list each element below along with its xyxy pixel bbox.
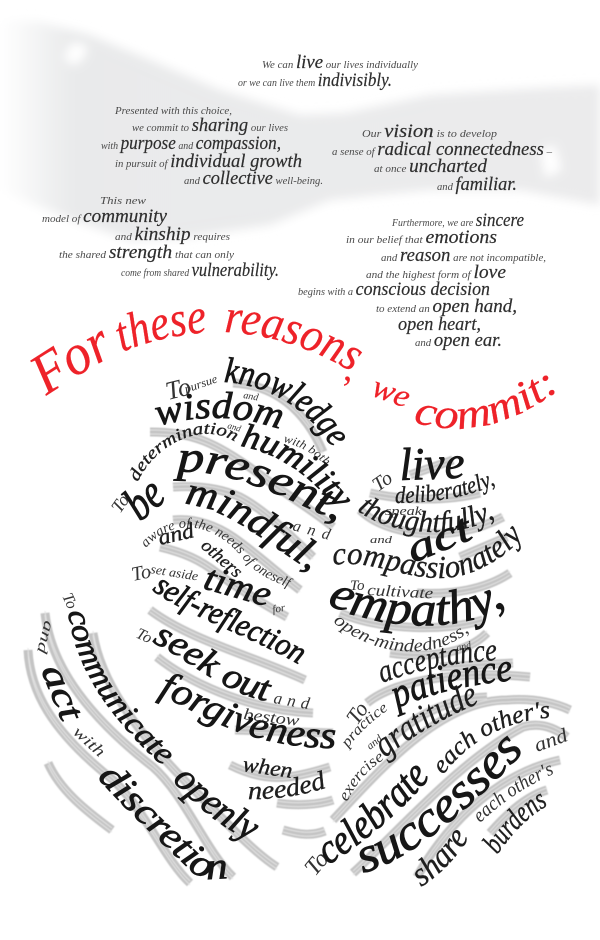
commitment: practice patience and exercise gratitude xyxy=(341,662,512,801)
paragraph: furthermore, we are sincere: begins with a conscious decision xyxy=(298,279,490,300)
paragraph: our vision: at once uncharted xyxy=(374,156,487,177)
commitment: live deliberately, speak thoughtfully, act compassionately: speak xyxy=(385,503,422,518)
commitment: set aside time for self-reflection: time xyxy=(200,557,276,614)
commitment: pursue knowledge and wisdom: knowledge xyxy=(224,356,345,446)
heading: for these reasons, we commit: , xyxy=(343,348,352,388)
commitment: cultivate empathy, open-mindedness and acceptance: open-mindedness, xyxy=(334,618,469,652)
commitment: celebrate successes and share burdens: To xyxy=(300,846,334,881)
intro text: live individually or indivisibly: We can live our lives individually xyxy=(262,52,418,73)
commitment: celebrate successes and share burdens: and xyxy=(531,724,572,757)
ink brush strokes behind the commitments xyxy=(28,381,570,885)
commitment: be present, mindful: and xyxy=(291,517,333,544)
commitment: cultivate empathy, open-mindedness and acceptance: empathy, xyxy=(330,588,504,634)
paragraph: furthermore, we are sincere: to extend an open hand, xyxy=(376,296,517,317)
commitment: live deliberately, speak thoughtfully, act compassionately xyxy=(333,437,521,578)
commitment: be present, mindful: and xyxy=(156,517,197,550)
paragraph: presented with this choice xyxy=(101,105,323,189)
commitment: communicate openly and act with discretion: To xyxy=(58,591,80,612)
commitment: pursue knowledge and wisdom: pursue xyxy=(181,371,220,396)
commitment: be present, mindful: be xyxy=(113,467,175,530)
commitment: practice patience and exercise gratitude: patience xyxy=(392,662,512,718)
commitment: practice patience and exercise gratitude: practice xyxy=(343,704,387,751)
commitment: seek out and bestow forgiveness: needed xyxy=(248,770,326,800)
paragraph: our vision: a sense of radical connectedness – xyxy=(332,139,552,160)
intro text: live individually or indivisibly: or we can live them indivisibly. xyxy=(238,70,392,91)
paragraph: presented with this choice: Presented with this choice, xyxy=(114,105,232,117)
commitment: cultivate empathy, open-mindedness and acceptance: cultivate xyxy=(367,582,434,602)
commitment: celebrate successes and share burdens: each other's xyxy=(476,764,553,822)
paragraph: this new model of community: come from shared vulnerability. xyxy=(121,260,279,281)
commitment: practice patience and exercise gratitude: and xyxy=(364,732,385,752)
commitment: set aside time for self-reflection: self-reflection xyxy=(152,580,304,664)
commitment: set aside time for self-reflection: for xyxy=(271,602,287,616)
commitment: live deliberately, speak thoughtfully, act compassionately: thoughtfully, xyxy=(358,498,494,538)
paragraph: furthermore, we are sincere: Furthermore, we are sincere xyxy=(391,210,524,231)
commitment: pursue knowledge and wisdom: To xyxy=(162,372,194,406)
intro text: live individually or indivisibly xyxy=(238,52,418,91)
commitment: seek out and bestow forgiveness: and xyxy=(272,688,312,713)
commitment: celebrate successes and share burdens: celebrate xyxy=(322,766,428,863)
commitment: set aside time for self-reflection: To xyxy=(129,560,153,586)
commitment: pursue knowledge and wisdom: determination xyxy=(130,422,238,481)
commitment: communicate openly and act with discretion: openly xyxy=(174,772,258,842)
paragraph: presented with this choice: we commit to sharing our lives xyxy=(132,115,288,136)
paragraph: this new model of community xyxy=(42,195,279,281)
commitment: celebrate successes and share burdens: share xyxy=(415,830,467,886)
commitment: seek out and bestow forgiveness: To xyxy=(133,625,154,647)
paragraph: our vision: and familiar. xyxy=(437,174,517,195)
heading: for these reasons, we commit: commit: xyxy=(416,376,554,430)
heading: for these reasons, we commit: these xyxy=(116,309,205,351)
commitment: communicate openly and act with discretion: discretion xyxy=(99,770,227,880)
commitment: pursue knowledge and wisdom: and xyxy=(226,420,243,434)
paragraph: furthermore, we are sincere xyxy=(298,210,546,351)
background: gray watercolor wash xyxy=(0,20,600,240)
paragraph: this new model of community: the shared strength that can only xyxy=(59,242,234,263)
commitment: cultivate empathy, open-mindedness and acceptance: and xyxy=(455,640,473,654)
paragraph: our vision xyxy=(332,121,552,195)
commitment: be present, mindful: To xyxy=(107,491,133,516)
commitment: seek out and bestow forgiveness xyxy=(133,625,336,800)
commitment: live deliberately, speak thoughtfully, act compassionately: To xyxy=(368,467,397,496)
commitment: celebrate successes and share burdens: successes xyxy=(360,736,521,873)
paragraph: presented with this choice: and collective well-being. xyxy=(184,168,323,189)
commitment: live deliberately, speak thoughtfully, act compassionately: live xyxy=(399,437,465,490)
commitment: cultivate empathy, open-mindedness and acceptance xyxy=(330,578,504,682)
heading: for these reasons, we commit: For xyxy=(30,330,104,396)
paragraph: furthermore, we are sincere: open heart, xyxy=(398,314,481,335)
commitment: practice patience and exercise gratitude: exercise xyxy=(342,754,384,801)
heading: for these reasons, we commit: reasons xyxy=(226,310,362,370)
commitment: be present, mindful: mindful, xyxy=(185,485,318,572)
commitment: seek out and bestow forgiveness: when xyxy=(241,751,294,783)
commitment: communicate openly and act with discretion xyxy=(33,591,258,880)
commitment: pursue knowledge and wisdom: humility xyxy=(240,423,350,505)
commitment: be present, mindful: others xyxy=(197,535,247,582)
commitment: live deliberately, speak thoughtfully, act compassionately: and xyxy=(370,535,393,546)
heading: for these reasons, we commit xyxy=(30,309,554,430)
commitment: pursue knowledge and wisdom: with both xyxy=(284,436,330,464)
commitment: be present, mindful xyxy=(107,450,336,590)
commitment: seek out and bestow forgiveness: seek out xyxy=(152,630,272,701)
commitment: communicate openly and act with discretion: with xyxy=(69,723,108,761)
commitment: seek out and bestow forgiveness: forgiveness xyxy=(154,674,336,749)
paragraph: this new model of community: model of community xyxy=(42,206,168,227)
commitment: live deliberately, speak thoughtfully, act compassionately: compassionately xyxy=(333,526,521,578)
paragraph: furthermore, we are sincere: and the highest form of love xyxy=(366,262,506,283)
paragraph: furthermore, we are sincere: in our belief that emotions xyxy=(346,227,497,248)
commitment: communicate openly and act with discretion: communicate xyxy=(68,612,172,764)
commitment: communicate openly and act with discretion: act xyxy=(34,658,93,727)
paragraph: presented with this choice: with purpose and compassion, xyxy=(101,133,281,154)
commitment: pursue knowledge and wisdom: wisdom xyxy=(154,391,282,429)
paragraph: furthermore, we are sincere: and open ear. xyxy=(415,330,502,351)
commitment: pursue knowledge and wisdom: and xyxy=(242,390,260,404)
commitment: cultivate empathy, open-mindedness and acceptance: acceptance xyxy=(380,645,496,682)
commitment: be present, mindful: aware of the needs of oneself xyxy=(143,518,294,590)
commitment: be present, mindful: present, xyxy=(173,450,336,524)
paragraph: this new model of community: and kinship requires xyxy=(115,224,230,245)
commitment: celebrate successes and share burdens: each other's xyxy=(437,702,550,773)
heading: for these reasons, we commit: we xyxy=(368,368,416,415)
commitment: practice patience and exercise gratitude: To xyxy=(341,697,373,729)
commitment: celebrate successes and share burdens xyxy=(300,702,572,886)
commitment: set aside time for self-reflection: set aside xyxy=(150,561,200,584)
paragraph: presented with this choice: in pursuit of individual growth xyxy=(115,151,302,172)
paragraph: furthermore, we are sincere: and reason are not incompatible, xyxy=(381,245,546,266)
commitment: practice patience and exercise gratitude: gratitude xyxy=(379,685,478,764)
commitment: pursue knowledge and wisdom xyxy=(130,356,350,505)
commitment: seek out and bestow forgiveness: bestow xyxy=(243,706,301,730)
paragraph: our vision: Our vision is to develop xyxy=(362,121,498,142)
commitment: communicate openly and act with discretion: and xyxy=(33,619,57,656)
commitment: cultivate empathy, open-mindedness and acceptance: To xyxy=(350,578,365,594)
commitment: celebrate successes and share burdens: burdens xyxy=(481,794,546,854)
commitment: live deliberately, speak thoughtfully, act compassionately: act xyxy=(400,504,479,571)
paragraph: this new model of community: This new xyxy=(100,195,147,207)
commitment: live deliberately, speak thoughtfully, act compassionately: deliberately, xyxy=(396,474,495,504)
